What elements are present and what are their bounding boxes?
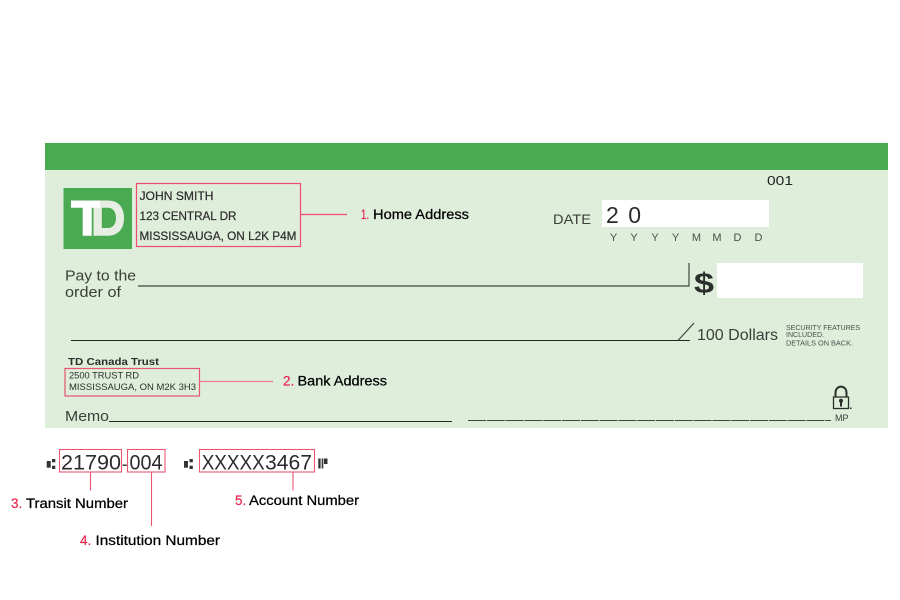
date format letters: M — [712, 232, 722, 244]
date format letters: M — [692, 232, 701, 244]
panel: cheque body — [45, 143, 888, 428]
dash — [123, 464, 127, 466]
text: home address: 123 CENTRAL DR — [140, 209, 237, 223]
leader line: transit number — [90, 472, 92, 490]
text: institution number: 004 — [130, 452, 163, 474]
text: security note: SECURITY FEATURES — [786, 325, 860, 332]
amount field — [717, 263, 863, 298]
text: bank name: TD Canada Trust — [68, 357, 160, 368]
text: 100 Dollars: 100 Dollars — [697, 327, 778, 344]
label: 2. Bank Address: Bank Address — [298, 374, 387, 388]
label: date: DATE — [553, 211, 591, 227]
text: security note — [786, 325, 860, 348]
date value: 20 — [606, 202, 641, 228]
text: MP: MP — [835, 413, 848, 423]
date format letters: Y — [672, 232, 680, 244]
payee line — [138, 263, 689, 286]
leader line: institution number — [150, 472, 152, 526]
callout box: institution number — [128, 450, 165, 472]
callout box: home address — [136, 184, 300, 246]
label: 2. Bank Address: 2. — [283, 374, 294, 388]
label: 1. Home Address: Home Address — [373, 207, 469, 222]
icon: padlock — [834, 387, 852, 409]
label: 5. Account Number: Account Number — [249, 493, 360, 508]
leader line: account number — [292, 472, 294, 490]
label: 1. Home Address: 1. — [361, 207, 369, 222]
icon: transit symbol left — [47, 459, 55, 469]
signature line — [468, 420, 831, 422]
text: home address — [140, 189, 296, 243]
text: account number: 3467 — [265, 452, 312, 474]
label: 4. Institution Number: 4. — [80, 533, 91, 548]
text: security note: INCLUDED. — [786, 332, 824, 339]
text: account number: XXXXX — [202, 452, 265, 474]
text: home address: JOHN SMITH — [140, 189, 214, 203]
label: pay to the order of — [65, 268, 136, 301]
text: bank address: MISSISSAUGA, ON M2K 3H3 — [69, 382, 196, 393]
text: home address: MISSISSAUGA, ON L2K P4M — [140, 229, 296, 243]
label: pay to the order of: order of — [65, 284, 122, 301]
green header band — [45, 143, 888, 170]
dollar sign: $ — [694, 268, 714, 300]
slash — [678, 323, 694, 340]
amount in words line — [71, 340, 690, 342]
leader line: home address — [300, 214, 347, 216]
cheque number: 001 — [767, 173, 793, 188]
date format letters: D — [755, 232, 763, 244]
label: 3. Transit Number: 3. — [11, 496, 22, 511]
date field — [602, 200, 769, 227]
date format letters: Y — [610, 232, 618, 244]
date format letters: Y — [651, 232, 659, 244]
text: security note: DETAILS ON BACK. — [786, 340, 853, 348]
callout box: bank address — [65, 368, 200, 396]
memo line — [109, 420, 452, 422]
icon: on-us symbol — [318, 458, 328, 468]
text: transit number: 21790 — [61, 452, 121, 474]
text: bank address — [69, 370, 196, 393]
callout box: account number — [200, 450, 314, 472]
date format letters: D — [734, 232, 742, 244]
label: memo: Memo — [65, 408, 109, 425]
leader line: bank address — [200, 380, 273, 382]
text: account number — [202, 452, 312, 474]
label: 3. Transit Number: Transit Number — [26, 496, 129, 511]
label: pay to the order of: Pay to the — [65, 268, 136, 284]
icon: transit symbol right — [184, 459, 193, 469]
date format letters: Y — [630, 232, 638, 244]
label: 5. Account Number: 5. — [235, 493, 246, 508]
date format letters — [610, 232, 763, 244]
callout box: transit number — [60, 450, 122, 472]
text: bank address: 2500 TRUST RD — [69, 370, 139, 382]
icon: TD logo — [64, 188, 132, 249]
label: 4. Institution Number: Institution Number — [96, 533, 221, 548]
